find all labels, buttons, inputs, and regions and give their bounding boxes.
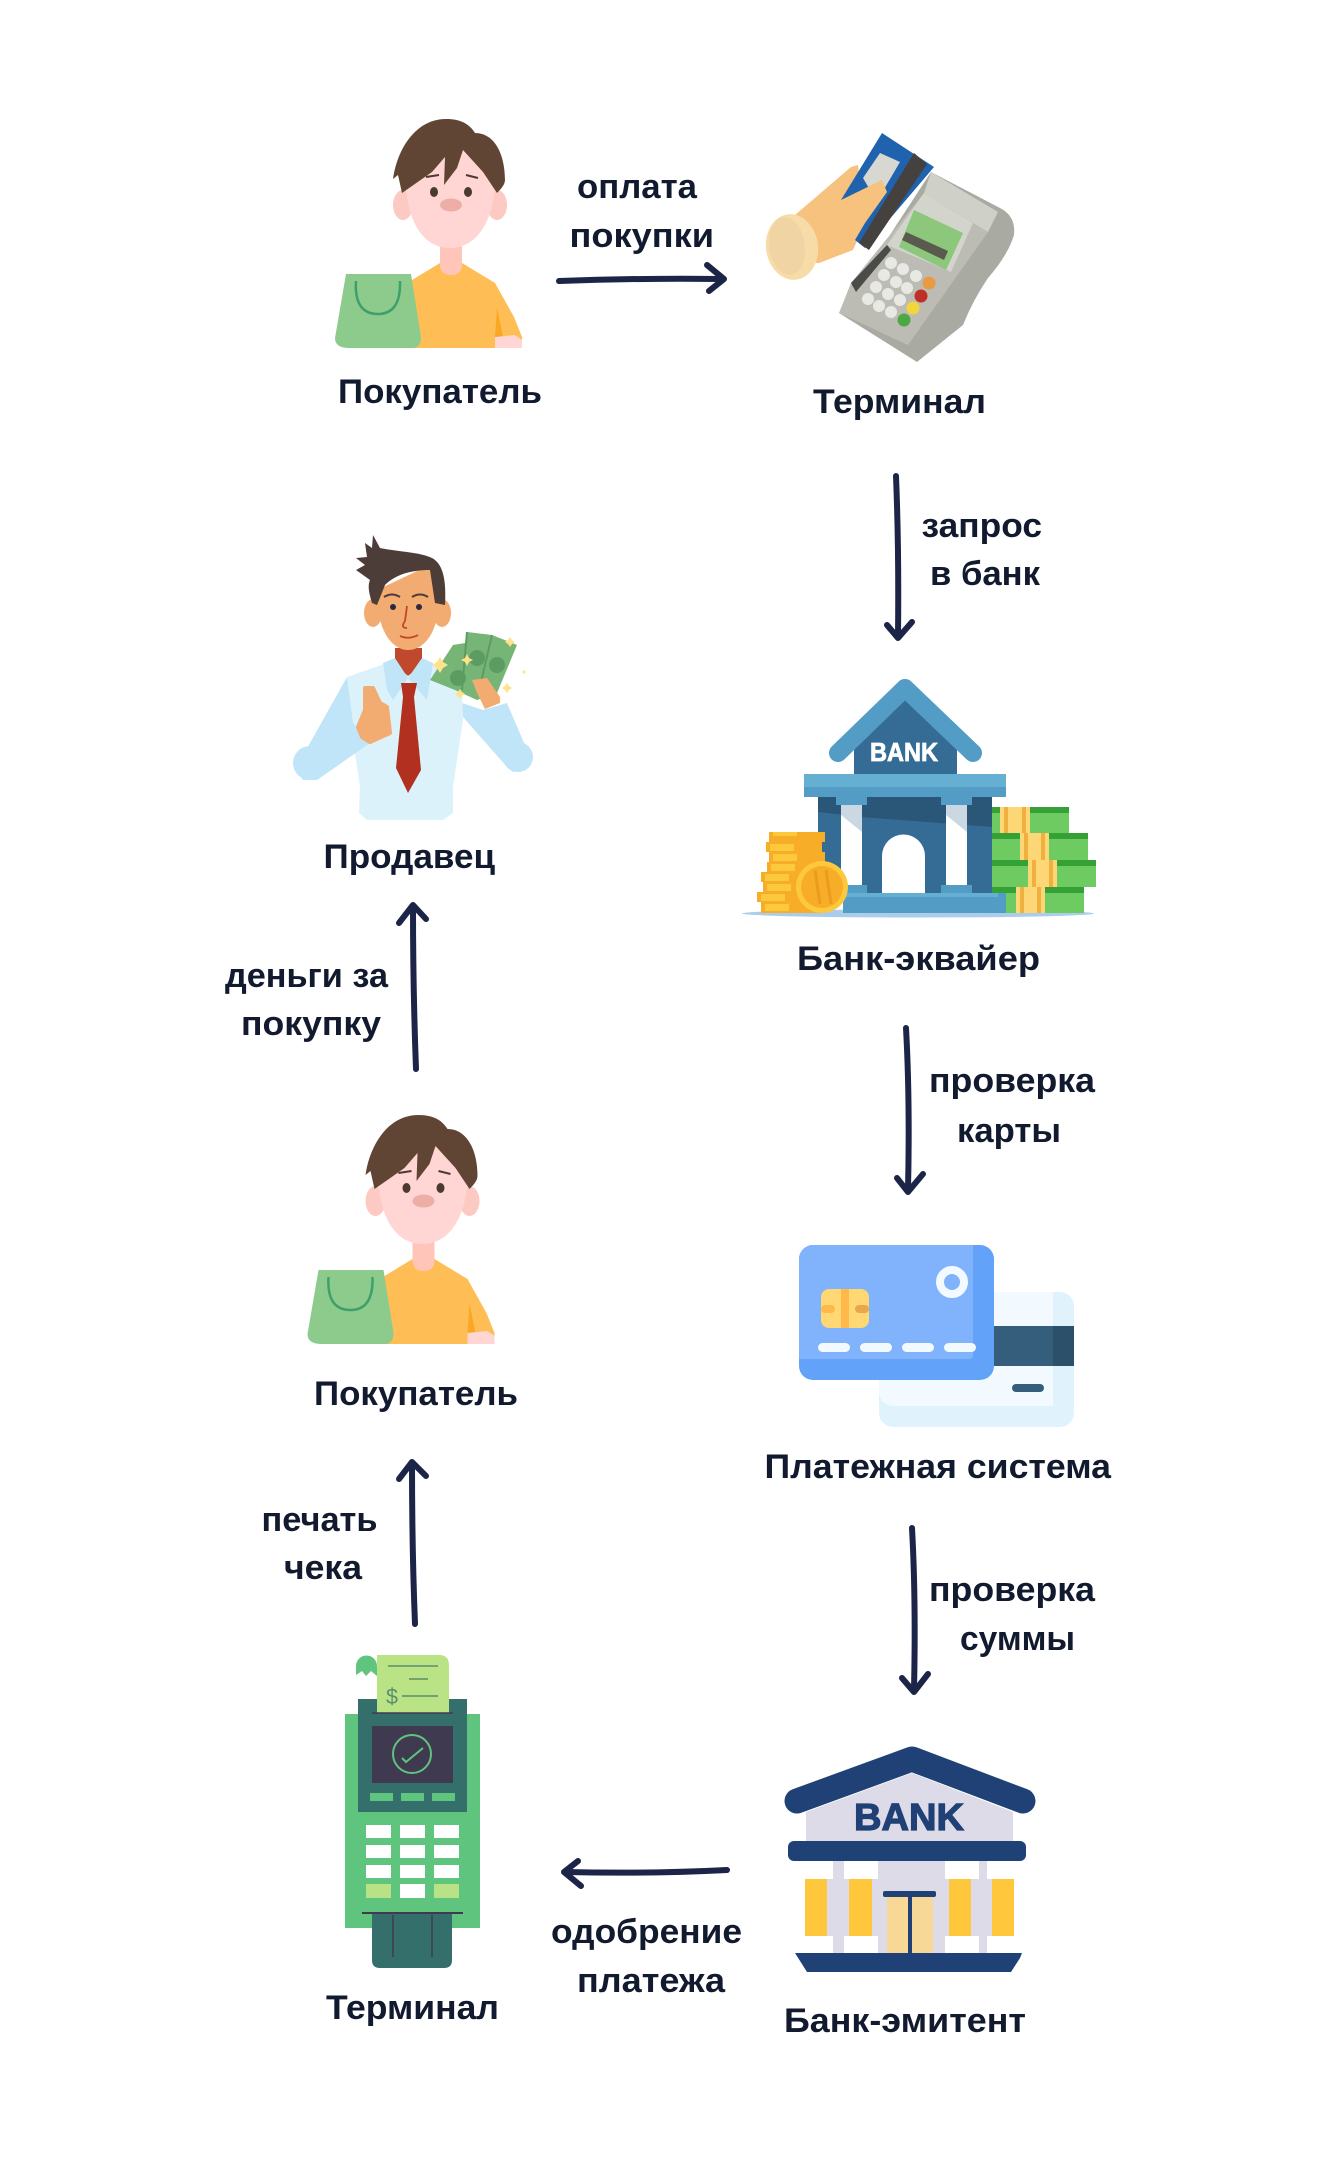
arrow label: amount check: суммы [960,1620,1075,1658]
icon: buyer with shopping bag (top) [335,119,522,348]
arrow: terminal to acquirer bank [887,476,912,638]
icon: issuer bank [788,1759,1026,1972]
arrow label: request to bank: в банк [930,555,1041,593]
arrow label: money for purchase: покупку [241,1005,381,1043]
arrow label: request to bank [922,507,1042,593]
label: seller: Продавец [324,838,495,876]
arrow label: amount check [929,1571,1096,1658]
label: terminal (bottom): Терминал [326,1989,499,2027]
icon: terminal printing receipt: $ [386,1684,398,1709]
arrow label: amount check: проверка [929,1571,1096,1609]
label: acquirer bank: Банк-эквайер [797,940,1040,978]
arrow label: card check: проверка [929,1062,1096,1100]
arrow label: money for purchase: деньги за [225,957,389,995]
icon: acquirer bank with coins and cash: BANK [870,737,938,767]
icon: acquirer bank with coins and cash [742,688,1096,918]
arrow label: print receipt [262,1501,378,1587]
icon: seller with money [293,535,533,820]
arrow label: print receipt: печать [262,1501,378,1539]
arrow label: money for purchase [225,957,389,1043]
arrow label: payment approval: платежа [577,1962,726,2000]
arrow label: print receipt: чека [284,1549,363,1587]
arrow label: payment approval [551,1913,742,2000]
arrow label: payment [570,168,714,255]
arrow label: card check [929,1062,1096,1150]
icon: payment cards [799,1245,1074,1427]
arrow: buyer to terminal [559,265,724,291]
label: buyer (lower): Покупатель [314,1375,518,1413]
icon: hand with card at POS terminal [762,133,1014,362]
icon: terminal printing receipt [345,1655,480,1968]
icon: buyer with shopping bag (lower) [308,1115,494,1344]
label: terminal (top): Терминал [813,383,986,421]
arrow label: request to bank: запрос [922,507,1042,545]
arrow: terminal to buyer [399,1462,426,1624]
arrow: issuer bank to terminal [564,1861,727,1886]
arrow label: payment: покупки [570,217,714,255]
arrow label: card check: карты [957,1112,1061,1150]
label: buyer: Покупатель [338,373,542,411]
arrow: payment system to issuer bank [902,1528,928,1692]
arrow: acquirer to payment system [897,1028,923,1192]
label: payment system: Платежная система [764,1448,1112,1486]
arrow label: payment: оплата [577,168,698,206]
label: issuer bank: Банк-эмитент [784,2002,1026,2040]
icon: issuer bank: BANK [854,1797,965,1839]
arrow label: payment approval: одобрение [551,1913,742,1951]
arrow: buyer to seller [399,905,426,1069]
